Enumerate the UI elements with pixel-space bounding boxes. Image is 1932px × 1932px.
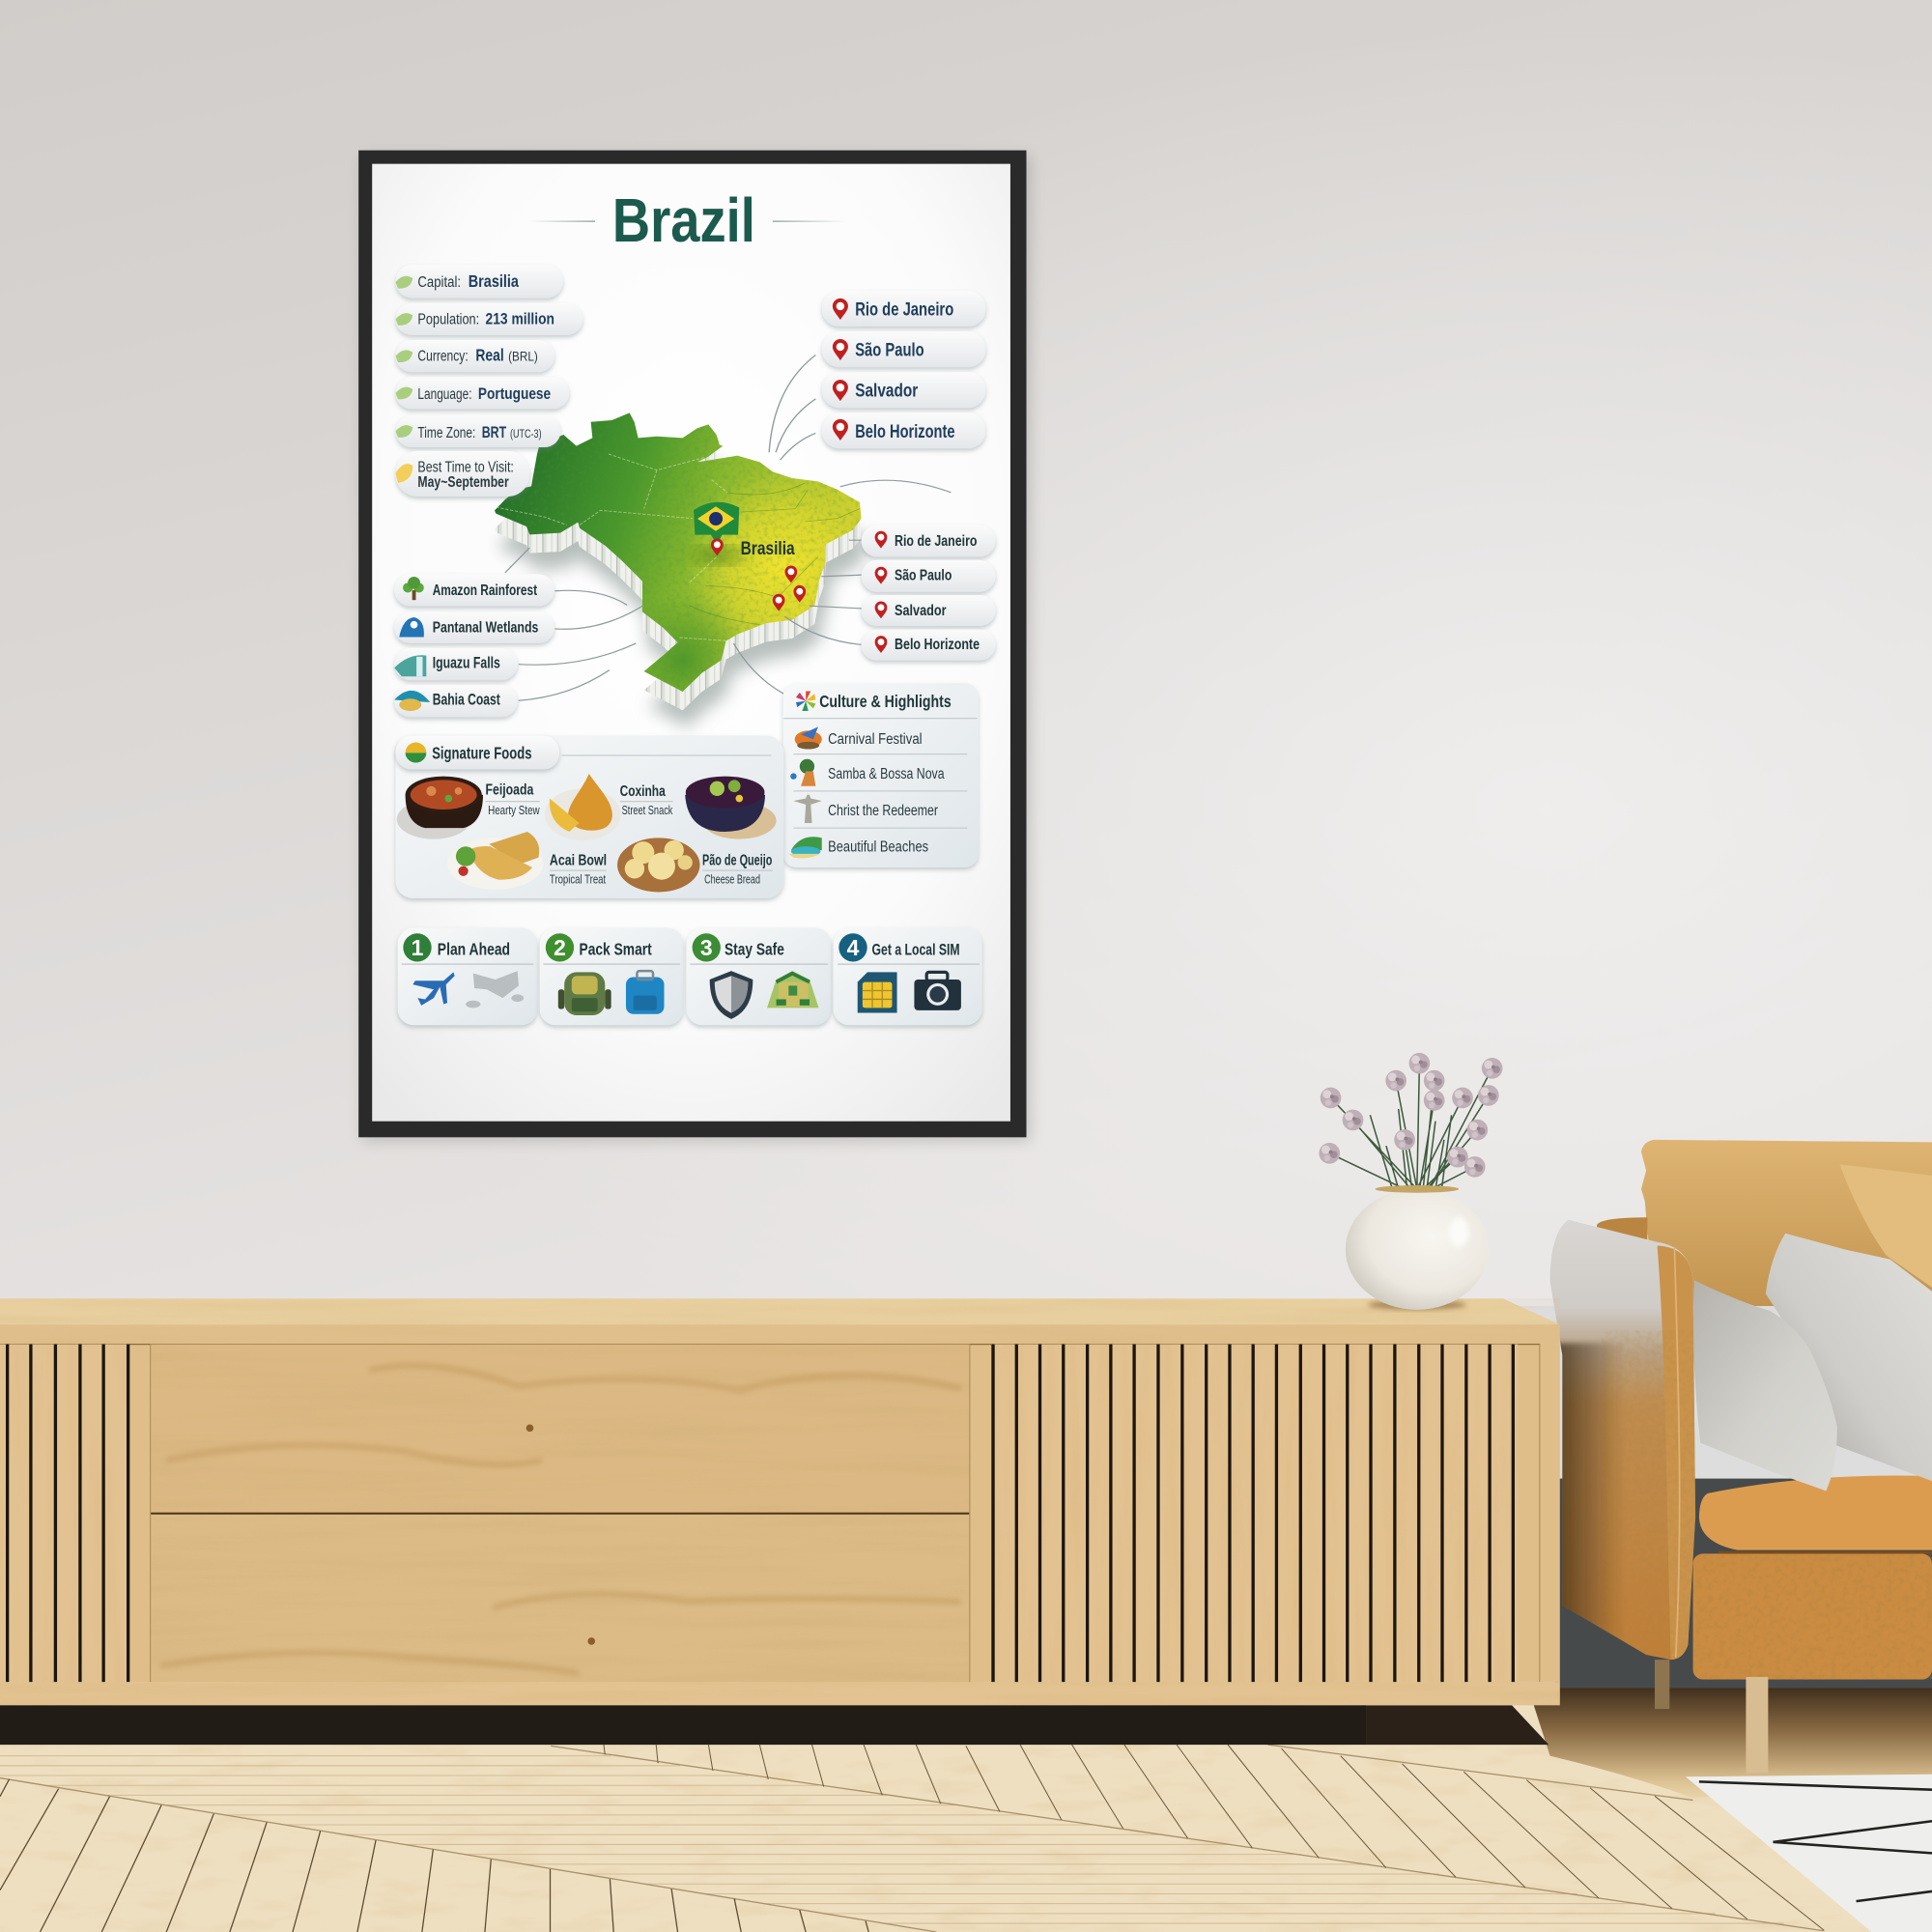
tip 2: pack smart: Pack Smart	[579, 940, 652, 959]
icon: Christ the Redeemer	[793, 795, 822, 823]
fact: capital	[395, 265, 563, 298]
fact: time zone	[395, 415, 560, 447]
map city pins	[773, 565, 806, 611]
food: Feijoada: Hearty Stew	[488, 803, 540, 817]
travel tips	[398, 927, 982, 1025]
fact: currency: Currency:	[417, 349, 469, 365]
fact: language: Portuguese	[478, 384, 551, 403]
poster frame	[358, 151, 1030, 1141]
tip 1: plan ahead: Plan Ahead	[438, 940, 510, 959]
tip 1: plan ahead	[398, 927, 537, 1025]
city: Belo Horizonte: Belo Horizonte	[895, 637, 980, 653]
armrest shading and texture	[1550, 1246, 1695, 1663]
seat base	[1693, 1553, 1932, 1680]
seat cushion	[1699, 1475, 1932, 1550]
rear leg	[1655, 1660, 1669, 1709]
tip 4: local SIM: Get a Local SIM	[872, 941, 960, 959]
fact: currency: (BRL)	[508, 349, 538, 364]
tip 2: pack smart: 2	[554, 935, 566, 960]
attraction: Pantanal Wetlands	[394, 612, 554, 643]
city: São Paulo: São Paulo	[895, 568, 952, 584]
food: Feijoada	[397, 777, 540, 839]
fact: best time: Best Time to Visit:	[417, 460, 514, 476]
back cushion	[1641, 1140, 1932, 1306]
city: Rio de Janeiro	[862, 525, 996, 557]
rear orange pillow	[1839, 1164, 1932, 1288]
fact: currency: Real	[475, 346, 504, 365]
icon: culture pinwheel	[796, 692, 815, 711]
icon: shield	[710, 971, 753, 1019]
food: Pão de Queijo: Pão de Queijo	[702, 852, 773, 868]
attraction: Bahia Coast	[394, 685, 518, 717]
fact: time zone: Time Zone:	[417, 425, 475, 441]
grey pillow front	[1693, 1280, 1837, 1491]
cities list lower	[862, 525, 996, 661]
slatted door left	[0, 1345, 129, 1682]
map of Brazil	[493, 412, 867, 727]
food: Coxinha	[545, 774, 673, 840]
wood figure streaks	[160, 1365, 961, 1673]
sideboard cabinet	[0, 1298, 1560, 1745]
fact: currency	[395, 340, 554, 372]
food: wrap: Tropical Treat	[550, 872, 607, 887]
attraction: Amazon Rainforest: Amazon Rainforest	[433, 582, 538, 599]
icon: backpack	[558, 972, 611, 1015]
fact: best time	[395, 451, 529, 497]
capital marker with flag: Brasilia	[741, 539, 795, 559]
upper-middle planks	[604, 1745, 1824, 1930]
tip 1: plan ahead: 1	[412, 935, 424, 960]
tip 2: pack smart	[540, 927, 683, 1025]
icon: foods	[406, 742, 426, 763]
grey pillow rear	[1766, 1234, 1932, 1481]
tip 4: local SIM	[834, 927, 982, 1025]
icon: tent	[767, 971, 819, 1008]
armrest	[1550, 1220, 1695, 1660]
tip 3: stay safe: 3	[700, 935, 713, 960]
icon: Brazil flag	[694, 502, 739, 545]
city: Rio de Janeiro	[822, 291, 985, 327]
panel: signature foods	[395, 735, 783, 898]
fact: language	[395, 377, 569, 409]
icon: camera	[914, 972, 961, 1010]
city: Belo Horizonte: Belo Horizonte	[855, 422, 955, 442]
fact: capital: Capital:	[417, 274, 461, 291]
attraction: Bahia Coast: Bahia Coast	[433, 691, 500, 709]
city: Salvador: Salvador	[895, 603, 947, 619]
dark wall behind sofa	[1555, 1479, 1932, 1688]
tip 3: stay safe	[686, 927, 831, 1025]
tip 4: local SIM: 4	[847, 935, 860, 960]
food: Coxinha: Coxinha	[620, 783, 666, 800]
fact: best time: May~September	[417, 474, 509, 491]
fact pills	[395, 265, 582, 497]
connector lines	[505, 355, 951, 700]
panel: culture and highlights	[783, 683, 979, 867]
food: Pão de Queijo	[617, 838, 773, 892]
food: Pão de Queijo: Cheese Bread	[704, 872, 760, 887]
icon: airplane	[412, 972, 455, 1006]
fact: capital: Brasilia	[469, 271, 520, 291]
slatted door right	[992, 1345, 1518, 1682]
city: Belo Horizonte	[862, 630, 996, 661]
fact: time zone: BRT	[482, 423, 506, 441]
panel: culture and highlights: Christ the Redeemer	[828, 803, 939, 819]
city: Salvador: Salvador	[855, 382, 919, 402]
icon: beach	[788, 837, 822, 858]
food: wrap	[447, 832, 607, 890]
fact: time zone: (UTC-3)	[510, 427, 542, 440]
sofa	[1550, 1140, 1932, 1773]
floor shadow under sofa	[1528, 1687, 1932, 1798]
icon: carnival	[795, 727, 822, 750]
title: Brazil	[612, 185, 755, 255]
vase with flowers	[1319, 1053, 1502, 1310]
panel: culture and highlights: Samba & Bossa Nova	[828, 766, 945, 782]
capital marker with flag	[694, 502, 795, 559]
fact: language: Language:	[417, 386, 472, 403]
city: Rio de Janeiro: Rio de Janeiro	[895, 533, 978, 550]
cities list upper	[822, 291, 985, 448]
city: Rio de Janeiro: Rio de Janeiro	[855, 300, 953, 321]
horizontal plank band	[0, 1756, 1784, 1923]
tip 3: stay safe: Stay Safe	[724, 940, 784, 959]
panel: culture and highlights: Beautiful Beaches	[828, 838, 928, 855]
city: Salvador	[822, 372, 985, 408]
food: Feijoada: Feijoada	[486, 782, 533, 799]
icon: SIM card	[858, 972, 897, 1012]
fact: population: Population:	[417, 311, 479, 327]
icon: blue bag	[626, 971, 665, 1014]
city: Belo Horizonte	[822, 412, 985, 448]
panel: culture and highlights: Carnival Festival	[828, 731, 923, 748]
floor shadow of cabinet	[1367, 1705, 1548, 1745]
attraction: Iguazu Falls: Iguazu Falls	[433, 653, 500, 671]
city: São Paulo	[822, 331, 985, 367]
city: São Paulo	[862, 560, 996, 592]
food: wrap: Acai Bowl	[550, 852, 607, 868]
food: Acai bowl	[685, 777, 777, 839]
fact: population	[395, 303, 582, 335]
city: Salvador	[862, 595, 996, 626]
drawer panels	[151, 1345, 992, 1682]
icon: gray map	[466, 971, 524, 1008]
icon: samba dancer	[790, 759, 815, 786]
floor: herringbone parquet	[0, 1687, 1932, 1932]
attraction: Amazon Rainforest	[394, 574, 554, 607]
attraction: Pantanal Wetlands: Pantanal Wetlands	[433, 619, 538, 636]
panel: culture and highlights: Culture & Highlights	[819, 692, 952, 711]
city: São Paulo: São Paulo	[855, 341, 924, 361]
front leg	[1746, 1677, 1768, 1773]
arm roll behind	[1597, 1217, 1647, 1247]
food: Coxinha: Street Snack	[622, 803, 673, 817]
natural attractions	[394, 574, 554, 717]
panel: signature foods: Signature Foods	[432, 744, 532, 763]
fact: population: 213 million	[486, 309, 554, 327]
attraction: Iguazu Falls	[394, 648, 518, 680]
wall background	[0, 0, 1932, 1306]
rug	[1686, 1775, 1932, 1932]
lower-left planks	[0, 1779, 868, 1932]
